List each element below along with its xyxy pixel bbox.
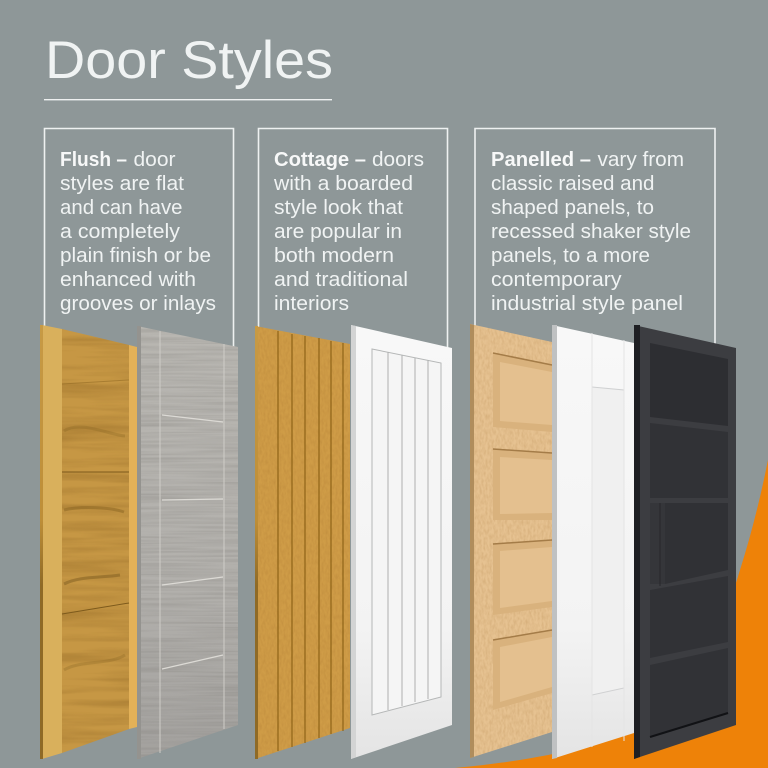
text block: flush description: door xyxy=(134,149,176,171)
text block: panelled description: shaped panels, to xyxy=(491,197,654,219)
raised panel 1 xyxy=(493,353,552,432)
door: panelled white shaker xyxy=(552,325,634,759)
text block: panelled description: contemporary xyxy=(491,269,622,291)
glazed panel 4 xyxy=(650,576,728,658)
text block: flush description: Flush – xyxy=(60,149,127,171)
glazed panel 2 xyxy=(650,423,728,498)
text block: cottage description: and traditional xyxy=(274,269,408,291)
text block: cottage description: both modern xyxy=(274,245,394,267)
text block: panelled description: classic raised and xyxy=(491,173,654,195)
frame: cottage xyxy=(258,128,448,350)
door: panelled black industrial xyxy=(634,325,736,759)
text block: cottage description xyxy=(273,149,424,315)
raised panel 2 xyxy=(493,449,552,520)
title: Door Styles xyxy=(45,31,333,90)
text block: flush description xyxy=(60,149,216,315)
text block: panelled description: panels, to a more xyxy=(491,245,650,267)
door: flush grey xyxy=(137,326,238,759)
text block: panelled description: Panelled – xyxy=(491,149,591,171)
text block: cottage description: Cottage – xyxy=(274,149,366,171)
title underline xyxy=(44,99,332,100)
text block: cottage description: with a boarded xyxy=(273,173,413,195)
door: flush oak xyxy=(40,325,137,759)
text block: flush description: plain finish or be xyxy=(60,245,211,267)
text block: flush description: and can have xyxy=(60,197,182,219)
text block: flush description: enhanced with xyxy=(60,269,196,291)
text block: cottage description: style look that xyxy=(274,197,403,219)
glazed panel 1 xyxy=(650,343,728,426)
text block: panelled description xyxy=(491,149,691,315)
text block: cottage description: are popular in xyxy=(274,221,402,243)
door: cottage oak xyxy=(255,326,350,759)
glazed panel 3 xyxy=(665,503,728,584)
text block: panelled description: recessed shaker style xyxy=(491,221,691,243)
text block: panelled description: industrial style panel xyxy=(491,293,683,315)
panel: cottage xyxy=(258,128,448,350)
text block: flush description: a completely xyxy=(60,221,180,243)
frame: flush xyxy=(44,128,234,350)
text block: panelled description: vary from xyxy=(598,149,684,171)
glazed panel 5 xyxy=(650,648,728,737)
panel: panelled xyxy=(475,128,715,350)
text block: cottage description: interiors xyxy=(274,293,349,315)
raised panel 4 xyxy=(493,630,552,710)
text block: flush description: styles are flat xyxy=(60,173,184,195)
panel: flush xyxy=(44,128,234,350)
door: panelled oak xyxy=(470,324,552,758)
frame: panelled xyxy=(475,128,715,350)
text block: flush description: grooves or inlays xyxy=(60,293,216,315)
text block: cottage description: doors xyxy=(372,149,424,171)
orange corner swoosh xyxy=(455,460,768,768)
raised panel 3 xyxy=(493,540,552,615)
door: cottage white xyxy=(351,325,452,759)
